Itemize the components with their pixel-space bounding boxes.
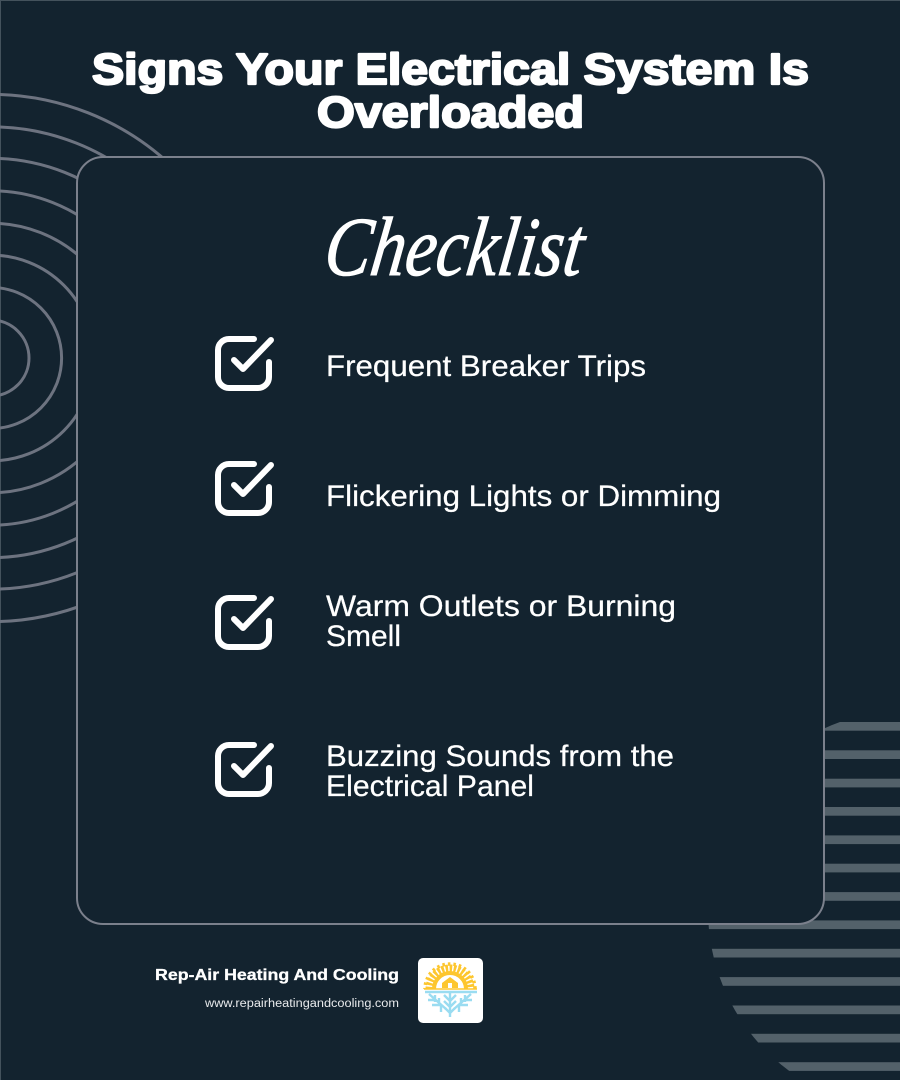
checklist item 1: [218, 339, 646, 388]
icon: company logo sun and snowflake: [418, 958, 483, 1023]
checklist item 4: [218, 740, 674, 803]
title: Overloaded: [317, 88, 584, 137]
checklist item 3: Warm Outlets or Burning: [326, 590, 676, 623]
title: Signs Your Electrical System Is: [92, 45, 809, 94]
heading: Checklist: Checklist: [319, 201, 592, 294]
decorative concentric arcs: [0, 94, 255, 622]
checklist item 2: Flickering Lights or Dimming: [326, 480, 721, 513]
checklist item 1: Frequent Breaker Trips: [326, 350, 646, 383]
decorative striped circle: [700, 722, 900, 1071]
footer company name and website: www.repairheatingandcooling.com: [204, 998, 399, 1010]
footer company name and website: Rep-Air Heating And Cooling: [155, 967, 399, 984]
checklist item 3: Smell: [326, 620, 401, 653]
checklist item 4: Electrical Panel: [326, 770, 534, 803]
panel: checklist: [77, 157, 824, 924]
title: [92, 45, 809, 137]
checklist item 3: [218, 590, 676, 653]
checklist item 4: Buzzing Sounds from the: [326, 740, 674, 773]
checklist item 2: [218, 464, 721, 513]
footer company name and website: [155, 967, 399, 1010]
